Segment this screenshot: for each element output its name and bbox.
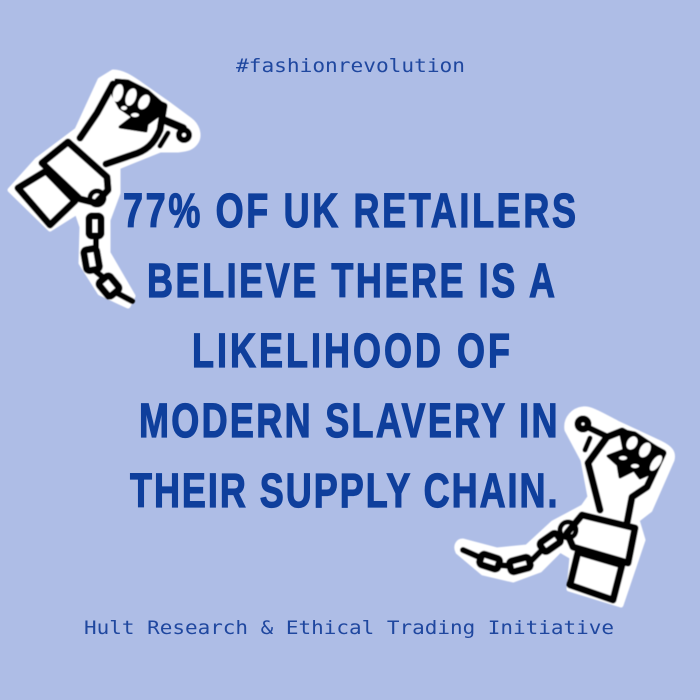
headline <box>123 184 576 517</box>
headline line 1: 77% OF UK RETAILERS <box>123 184 576 237</box>
headline line 4: MODERN SLAVERY IN <box>139 394 558 447</box>
headline line 2: BELIEVE THERE IS A <box>147 254 555 307</box>
source credit: Hult Research & Ethical Trading Initiative <box>84 617 614 639</box>
headline line 5: THEIR SUPPLY CHAIN. <box>130 464 558 517</box>
icon: shackled fist top left <box>10 72 198 306</box>
icon: shackled fist bottom right <box>457 409 672 605</box>
headline line 3: LIKELIHOOD OF <box>192 324 510 377</box>
hashtag: #fashionrevolution <box>236 55 465 77</box>
